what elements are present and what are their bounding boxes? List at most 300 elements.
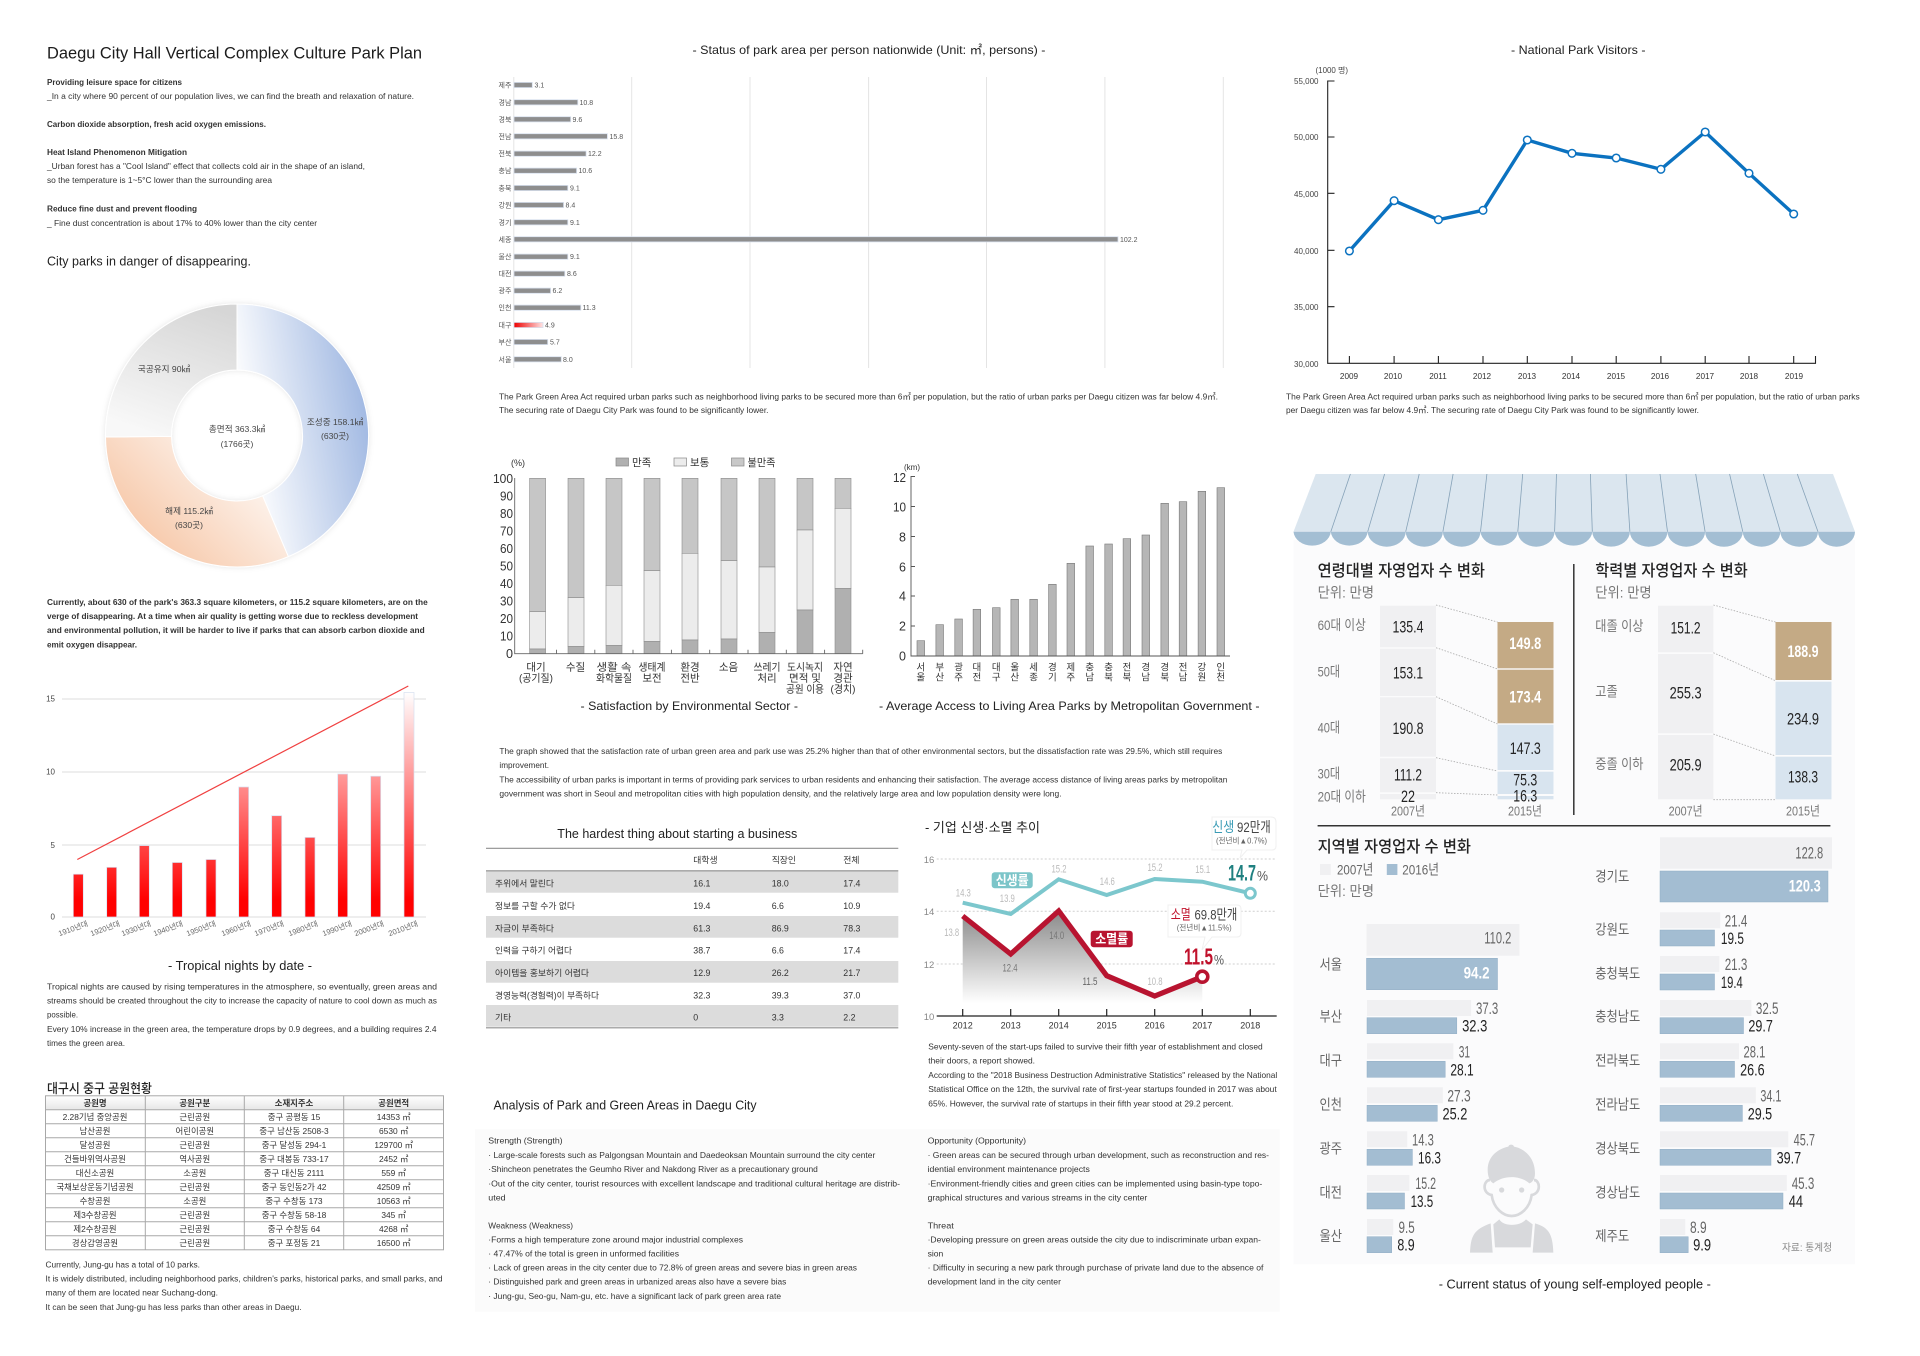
text block: disappearing parks xyxy=(47,597,428,650)
chart: self-employed by region: 강원도 xyxy=(1595,921,1629,937)
line chart: business creation and closure rates: 12.4 xyxy=(1002,962,1018,974)
bar chart: park area per person: 부산 xyxy=(499,338,512,346)
table: Jung-gu parks: 345 ㎡ xyxy=(381,1210,407,1220)
line chart: national park visitors: 2009 xyxy=(1340,372,1359,381)
title: Daegu City Hall Vertical Complex Culture Park Plan xyxy=(47,44,422,62)
bar chart: tropical nights: 10 xyxy=(46,768,56,776)
stacked bar chart: satisfaction by sector: 전반 xyxy=(680,672,700,684)
table: Jung-gu parks: 역사공원 xyxy=(179,1154,210,1164)
text: strength: ·Out of the city center, tourist resources with excellent landscape and traditional cultural heritage are distrib- xyxy=(488,1178,900,1188)
table: hardest thing about starting a business: 21.7 xyxy=(843,968,861,978)
chart: self-employed by age: 40대 xyxy=(1318,720,1340,736)
bar chart: access to living area parks: 강 xyxy=(1198,662,1207,674)
chart: self-employed by age: 20대 이하 xyxy=(1318,789,1366,805)
callout: closure count: 소멸 xyxy=(1171,906,1191,922)
legend: satisfaction xyxy=(616,457,776,469)
bar chart: park area per person: 8.6 xyxy=(567,271,577,278)
bar chart: park area per person: 3.1 xyxy=(534,82,544,90)
text block: start-up survival xyxy=(928,1041,1277,1108)
callout: creation count: (전년비▲0.7%) xyxy=(1216,836,1267,846)
table: Jung-gu parks: 근린공원 xyxy=(179,1182,210,1192)
bar chart: tropical nights xyxy=(46,686,426,938)
chart: self-employed by region: 8.9 xyxy=(1690,1218,1707,1237)
callout: closure count: 11.5 xyxy=(1184,944,1213,970)
chart: self-employed by age: 30대 xyxy=(1318,765,1340,781)
bar chart: park area per person: 8.0 xyxy=(563,357,573,364)
text block: satisfaction and accessibility: government was short in Seoul and metropolitan cities with high population density, and the relatively large area and low population density were long. xyxy=(499,788,1062,798)
chart: self-employed by age: 50대 xyxy=(1318,664,1340,680)
stacked bar chart: satisfaction by sector: 90 xyxy=(500,490,513,504)
text: weakness: · Lack of green areas in the city center due to 72.8% of green areas and severe bias in green areas xyxy=(488,1263,857,1273)
bar chart: access to living area parks xyxy=(893,463,1230,684)
bar chart: park area per person: 충북 xyxy=(499,184,512,192)
text: threat: development land in the city center xyxy=(928,1277,1061,1287)
text: weakness: · 47.47% of the total is green in unformed facilities xyxy=(488,1248,679,1258)
bar chart: access to living area parks: 북 xyxy=(1104,672,1113,684)
stacked bar chart: satisfaction by sector: 도시녹지 xyxy=(787,662,823,674)
chart: self-employed by age: 60대 이상 xyxy=(1318,617,1366,633)
bar chart: tropical nights: 1940년대 xyxy=(152,918,184,938)
bar chart: park area per person: 12.2 xyxy=(588,151,602,158)
chart: self-employed by age: 2007년 xyxy=(1391,804,1425,818)
text block: disappearing parks: verge of disappearing. At a time when air quality is getting worse due to reckless development xyxy=(47,611,418,621)
bar chart: tropical nights: 1920년대 xyxy=(89,918,121,938)
chart: self-employed by region: 충청북도 xyxy=(1595,965,1640,981)
bar chart: tropical nights: 1980년대 xyxy=(287,918,319,938)
text: opportunity: ·Environment-friendly cities and green cities can be implemented using basin-type topo- xyxy=(928,1178,1263,1188)
line chart: business creation and closure rates: 14 xyxy=(924,907,934,918)
callout: creation count: 92만개 xyxy=(1237,819,1271,835)
bar chart: tropical nights: 1950년대 xyxy=(185,918,217,938)
chart: self-employed by region: 9.9 xyxy=(1693,1236,1711,1255)
bar chart: tropical nights: 1990년대 xyxy=(321,918,353,938)
bar chart: tropical nights: 5 xyxy=(51,841,56,850)
line chart: national park visitors xyxy=(1294,65,1816,381)
text block: start-up survival: Statistical Office on the 12th, the survival rate of first-year startups founded in 2017 was about xyxy=(928,1084,1277,1094)
line chart: national park visitors: 50,000 xyxy=(1294,133,1319,142)
table: Jung-gu parks: 소공원 xyxy=(183,1168,206,1178)
donut chart: park area: 조성중 158.1㎢ xyxy=(307,417,364,427)
line chart: business creation and closure rates: 14.3 xyxy=(956,888,971,900)
text block: park benefits: Carbon dioxide absorption, fresh acid oxygen emissions. xyxy=(47,119,266,129)
text block: national park visitors: The Park Green Area Act required urban parks such as neighborhood living parks to be secured more than 6㎡ per population, but the ratio of urban parks xyxy=(1286,392,1860,402)
chart: self-employed by education: 대졸 이상 xyxy=(1595,618,1644,634)
bar chart: access to living area parks: 8 xyxy=(899,530,906,544)
table: Jung-gu parks: 국채보상운동기념공원 xyxy=(56,1182,134,1192)
callout: creation count: % xyxy=(1257,868,1268,884)
callout: creation count: 14.7 xyxy=(1228,860,1256,886)
text: strength: uted xyxy=(488,1192,506,1202)
callout: closure count: 69.8만개 xyxy=(1194,906,1237,922)
bar chart: park area per person: 경북 xyxy=(499,115,512,124)
line chart: national park visitors: (1000 명) xyxy=(1316,65,1348,75)
text block: park benefits: _Urban forest has a "Cool Island" effect that collects cold air in the shape of an island, xyxy=(46,161,365,171)
chart: self-employed by age: 135.4 xyxy=(1392,618,1424,637)
callout: closure count xyxy=(1168,905,1241,970)
chart: self-employed by region: 32.5 xyxy=(1756,999,1778,1018)
table: Jung-gu parks: 10563 ㎡ xyxy=(377,1196,411,1206)
line chart: national park visitors: 2016 xyxy=(1651,372,1670,381)
text block: Jung-gu parks: many of them are located near Suchang-dong. xyxy=(46,1288,218,1298)
stacked bar chart: satisfaction by sector: 20 xyxy=(500,612,513,626)
table: hardest thing about starting a business: 직장인 xyxy=(772,855,796,865)
table: Jung-gu parks: 제3수창공원 xyxy=(73,1210,117,1220)
text: threat: · Difficulty in securing a new park through purchase of private land due to the absence of xyxy=(928,1263,1264,1273)
table: Jung-gu parks: 중구 대신동 2111 xyxy=(264,1168,325,1178)
chart: self-employed by age: 22 xyxy=(1401,787,1415,806)
text: opportunity: idential environment maintenance projects xyxy=(928,1164,1090,1174)
table: Jung-gu parks: 중구 수창동 58-18 xyxy=(262,1210,327,1220)
text block: tropical nights: Tropical nights are caused by rising temperatures in the atmosphere, so eventually, green areas and xyxy=(47,982,437,992)
chart: self-employed by region: 경기도 xyxy=(1595,869,1629,885)
text block: satisfaction and accessibility: improvement. xyxy=(499,760,549,770)
line chart: business creation and closure rates: 2018 xyxy=(1240,1020,1260,1030)
text block: tropical nights: streams should be created throughout the city to increase the capacity of nature to cool down as much as xyxy=(47,996,437,1006)
chart title: national park visitors: - National Park Visitors - xyxy=(1511,43,1646,57)
table: hardest thing about starting a business: 경영능력(경험력)이 부족하다 xyxy=(495,989,599,1000)
chart title: park area per person: - Status of park area per person nationwide (Unit: ㎡, persons) - xyxy=(692,43,1046,57)
bar chart: park area per person: 9.1 xyxy=(570,186,580,192)
table: hardest thing about starting a business: 17.4 xyxy=(843,878,861,888)
table: Jung-gu parks: 근린공원 xyxy=(179,1112,210,1122)
bar chart: park area per person: 충남 xyxy=(499,166,512,175)
chart caption: access to living area parks: - Average Access to Living Area Parks by Metropolitan Government - xyxy=(879,699,1260,713)
stacked bar chart: satisfaction by sector: (공기질) xyxy=(519,672,553,684)
donut chart: park area: 총면적 363.3㎢ xyxy=(209,423,266,434)
stacked bar chart: satisfaction by sector: 60 xyxy=(500,542,513,556)
chart: self-employed by region xyxy=(1318,837,1832,1255)
text: strength: ·Shincheon penetrates the Geumho River and Nakdong River as a precautionary ground xyxy=(488,1164,818,1174)
bar chart: access to living area parks: 전 xyxy=(973,672,981,684)
chart: self-employed by education: 2015년 xyxy=(1786,804,1820,818)
chart: self-employed by region: 45.7 xyxy=(1794,1130,1815,1149)
chart title: business creation and closure: - 기업 신생·소멸 추이 xyxy=(925,820,1040,835)
table: hardest thing about starting a business: 39.3 xyxy=(772,990,789,1000)
chart: self-employed by education: 고졸 xyxy=(1595,684,1618,700)
bar chart: park area per person: 10.6 xyxy=(578,168,592,175)
table: hardest thing about starting a business: 아이템을 홍보하기 어렵다 xyxy=(495,967,589,978)
text: opportunity: graphical structures and various streams in the city center xyxy=(928,1192,1148,1202)
legend: satisfaction: 불만족 xyxy=(748,457,776,469)
table: Jung-gu parks: 달성공원 xyxy=(80,1140,110,1150)
table: Jung-gu parks: 대신소공원 xyxy=(76,1168,114,1178)
text block: Jung-gu parks xyxy=(46,1260,443,1312)
table: hardest thing about starting a business: 자금이 부족하다 xyxy=(495,924,554,934)
line chart: business creation and closure rates: 2013 xyxy=(1001,1020,1021,1030)
line chart: national park visitors: 40,000 xyxy=(1294,247,1319,256)
table: Jung-gu parks: 근린공원 xyxy=(179,1140,210,1150)
text block: park benefits: so the temperature is 1~5°C lower than the surrounding area xyxy=(47,175,272,185)
text block: park benefits: Heat Island Phenomenon Mitigation xyxy=(47,147,187,157)
table: Jung-gu parks: 중구 수창동 64 xyxy=(268,1224,321,1234)
text block: satisfaction and accessibility: The graph showed that the satisfaction rate of urban green area and park use was 25.2% higher than that of other environmental sectors, but the dissatisfaction rate was 29.5%, which still requires xyxy=(499,746,1222,756)
bar chart: access to living area parks: 남 xyxy=(1179,672,1188,684)
donut chart: park area: 국공유지 90㎢ xyxy=(138,364,190,374)
chart: self-employed by region: 15.2 xyxy=(1415,1174,1436,1193)
text: strength: Strength (Strength) xyxy=(488,1136,563,1146)
text block: park benefits: _In a city where 90 percent of our population lives, we can find the breath and relaxation of nature. xyxy=(46,91,414,101)
bar chart: access to living area parks: 울 xyxy=(1010,662,1019,674)
table: Jung-gu parks: 제2수창공원 xyxy=(73,1224,117,1234)
chart: self-employed by age: 111.2 xyxy=(1394,765,1422,784)
chart: self-employed by region: 제주도 xyxy=(1595,1228,1629,1244)
text block: national park visitors: per Daegu citizen was far below 4.9㎡. The securing rate of Daegu City Park was found to be significantly lower. xyxy=(1286,405,1699,415)
chart: self-employed by education: 151.2 xyxy=(1671,619,1701,638)
chart: self-employed by region: 45.3 xyxy=(1792,1174,1814,1193)
chart: self-employed by education: 255.3 xyxy=(1670,684,1702,703)
text: weakness xyxy=(488,1220,857,1301)
line chart: business creation and closure rates: 2014 xyxy=(1049,1020,1069,1030)
bar chart: park area per person: 경남 xyxy=(499,98,512,107)
bar chart: tropical nights: 0 xyxy=(51,912,56,922)
table: Jung-gu parks: 건들바위역사공원 xyxy=(64,1154,126,1164)
chart: self-employed by age: 연령대별 자영업자 수 변화 xyxy=(1318,562,1485,580)
table: hardest thing about starting a business: 6.6 xyxy=(772,901,784,911)
table: hardest thing about starting a business: 12.9 xyxy=(693,968,711,978)
stacked bar chart: satisfaction by sector: 소음 xyxy=(719,662,738,674)
line chart: national park visitors: 2018 xyxy=(1740,372,1759,381)
stacked bar chart: satisfaction by sector: 보전 xyxy=(642,672,662,684)
bar chart: park area per person: 전북 xyxy=(499,149,512,158)
bar chart: access to living area parks: 세 xyxy=(1029,662,1038,674)
donut chart: park area xyxy=(105,304,369,567)
table: hardest thing about starting a business xyxy=(486,848,898,1028)
bar chart: access to living area parks: 산 xyxy=(935,672,944,684)
text block: tropical nights xyxy=(47,982,437,1048)
table: hardest thing about starting a business: 18.0 xyxy=(772,878,789,888)
label: closure rate: 소멸률 xyxy=(1095,932,1128,946)
line chart: business creation and closure rates: 16 xyxy=(924,855,934,866)
icon: shop awning xyxy=(1294,474,1855,547)
chart: self-employed by age: 75.3 xyxy=(1513,770,1537,789)
legend: satisfaction: 보통 xyxy=(690,457,710,469)
bar chart: tropical nights: 2000년대 xyxy=(353,918,385,938)
line chart: business creation and closure rates: 15.2 xyxy=(1148,862,1162,874)
donut chart: park area: (1766곳) xyxy=(221,439,254,449)
chart: self-employed by age: 단위: 만명 xyxy=(1318,585,1374,601)
table: hardest thing about starting a business: 0 xyxy=(693,1013,698,1023)
label: creation rate: 신생률 xyxy=(996,873,1029,888)
chart: self-employed by education: 205.9 xyxy=(1670,755,1702,774)
table: hardest thing about starting a business: 6.6 xyxy=(772,946,784,956)
chart: self-employed by region: 대전 xyxy=(1320,1184,1342,1200)
chart: self-employed by age: 190.8 xyxy=(1392,719,1424,738)
text block: tropical nights: times the green area. xyxy=(47,1038,125,1048)
text block: start-up survival: According to the "2018 Business Destruction Administrative Statistics" released by the National xyxy=(928,1070,1277,1080)
legend: satisfaction: 만족 xyxy=(632,457,652,469)
table: Jung-gu parks xyxy=(46,1096,444,1250)
table: Jung-gu parks: 4268 ㎡ xyxy=(379,1224,409,1234)
bar chart: park area per person: 10.8 xyxy=(580,100,593,107)
line chart: business creation and closure rates: 2016 xyxy=(1145,1020,1165,1030)
bar chart: access to living area parks: 2 xyxy=(899,620,906,634)
chart: self-employed by region: 39.7 xyxy=(1777,1148,1801,1167)
text: strength: · Large-scale forests such as Palgongsan Mountain and Daedeoksan Mountain surround the city center xyxy=(488,1150,876,1160)
chart: self-employed by region: 26.6 xyxy=(1740,1060,1765,1079)
table: hardest thing about starting a business: 3.3 xyxy=(772,1013,784,1023)
text: weakness: · Distinguished park and green areas in urbanized areas also have a severe bias xyxy=(488,1277,786,1287)
stacked bar chart: satisfaction by sector: 처리 xyxy=(757,672,777,684)
bar chart: access to living area parks: 충 xyxy=(1085,662,1094,674)
chart: self-employed by region: 전라남도 xyxy=(1595,1096,1640,1112)
bar chart: park area per person: 인천 xyxy=(499,303,511,312)
table: hardest thing about starting a business: 19.4 xyxy=(693,901,711,911)
callout: creation count: 신생 xyxy=(1212,819,1234,835)
line chart: national park visitors: 35,000 xyxy=(1294,303,1319,312)
bar chart: access to living area parks: 원 xyxy=(1198,672,1206,684)
table: Jung-gu parks: 경상감영공원 xyxy=(72,1238,118,1248)
table: Jung-gu parks: 소재지주소 xyxy=(275,1098,314,1108)
table: Jung-gu parks: 남산공원 xyxy=(80,1126,110,1136)
text block: start-up survival: Seventy-seven of the start-ups failed to survive their fifth year of establishment and closed xyxy=(928,1041,1263,1051)
chart: self-employed by region: 44 xyxy=(1789,1192,1803,1211)
bar chart: access to living area parks: 대 xyxy=(992,662,1001,674)
bar chart: park area per person: 5.7 xyxy=(550,340,560,346)
table: Jung-gu parks: 2452 ㎡ xyxy=(379,1154,409,1164)
table title: hardest thing about starting a business: The hardest thing about starting a business xyxy=(557,827,797,841)
heading: analysis of park and green areas: Analysis of Park and Green Areas in Daegu City xyxy=(494,1098,757,1112)
line chart: national park visitors: 2014 xyxy=(1562,372,1581,381)
caption: young self-employed: - Current status of young self-employed people - xyxy=(1439,1278,1711,1292)
stacked bar chart: satisfaction by sector: 생태계 xyxy=(638,662,666,674)
text: weakness: ·Forms a high temperature zone around major industrial complexes xyxy=(488,1234,743,1244)
line chart: national park visitors: 45,000 xyxy=(1294,190,1319,199)
text block: park green area act: The securing rate of Daegu City Park was found to be significantly lower. xyxy=(499,405,768,415)
bar chart: park area per person: 9.1 xyxy=(570,220,580,227)
table: hardest thing about starting a business: 38.7 xyxy=(693,946,711,956)
text block: park benefits: Providing leisure space for citizens xyxy=(47,77,182,87)
chart: self-employed by age: 149.8 xyxy=(1509,634,1541,653)
table: Jung-gu parks: 2.28기념 중앙공원 xyxy=(63,1112,127,1122)
line chart: business creation and closure rates: 2015 xyxy=(1097,1020,1117,1030)
line chart: national park visitors: 2015 xyxy=(1607,372,1626,381)
text block: start-up survival: their doors, a report showed. xyxy=(928,1056,1035,1066)
bar chart: access to living area parks: 울 xyxy=(916,672,925,684)
table: hardest thing about starting a business: 전체 xyxy=(843,855,859,865)
text: opportunity: · Green areas can be secured through urban development, such as reconstruction and res- xyxy=(928,1150,1269,1160)
bar chart: access to living area parks: 4 xyxy=(899,590,906,604)
chart: self-employed by education: 단위: 만명 xyxy=(1595,585,1652,601)
table: Jung-gu parks: 근린공원 xyxy=(179,1238,210,1248)
table: hardest thing about starting a business: 대학생 xyxy=(693,855,718,865)
bar chart: access to living area parks: 전 xyxy=(1179,662,1187,674)
bar chart: access to living area parks: 북 xyxy=(1123,672,1132,684)
chart: self-employed by region: 대구 xyxy=(1320,1053,1342,1069)
bar chart: access to living area parks: 주 xyxy=(1066,672,1075,684)
bar chart: access to living area parks: 경 xyxy=(1141,662,1150,674)
table: hardest thing about starting a business: 16.1 xyxy=(693,878,711,888)
table: Jung-gu parks: 중구 포정동 21 xyxy=(268,1238,321,1248)
chart: self-employed by region: 94.2 xyxy=(1464,964,1490,983)
bar chart: park area per person: 세종 xyxy=(499,235,512,244)
text block: disappearing parks: Currently, about 630 of the park's 363.3 square kilometers, or 115.2 square kilometers, are on the xyxy=(47,597,428,607)
callout: closure count: (전년비▲11.5%) xyxy=(1177,922,1232,932)
chart: self-employed by age: 147.3 xyxy=(1510,739,1541,758)
text block: Jung-gu parks: It is widely distributed, including neighborhood parks, children's parks, historical parks, and small parks, and xyxy=(46,1274,443,1284)
bar chart: access to living area parks: 남 xyxy=(1141,672,1150,684)
heading: city parks in danger: City parks in danger of disappearing. xyxy=(47,254,251,268)
text block: start-up survival: 65%. However, the survival rate of startups in their fifth year stood at 29.2 percent. xyxy=(928,1098,1233,1108)
table: Jung-gu parks: 소공원 xyxy=(183,1196,206,1206)
table: Jung-gu parks: 16500 ㎡ xyxy=(377,1238,411,1248)
line chart: business creation and closure rates: 10.8 xyxy=(1148,976,1162,988)
chart: self-employed by region: 122.8 xyxy=(1795,843,1823,862)
table: Jung-gu parks: 14353 ㎡ xyxy=(377,1112,411,1122)
chart: self-employed by age: 2015년 xyxy=(1508,804,1542,818)
bar chart: park area per person: 4.9 xyxy=(545,322,555,330)
donut chart: park area: 해제 115.2㎢ xyxy=(165,506,213,516)
line chart: business creation and closure rates: 15.2 xyxy=(1052,864,1066,876)
chart: self-employed by region: 37.3 xyxy=(1476,999,1498,1018)
stacked bar chart: satisfaction by sector: 100 xyxy=(493,472,513,486)
bar chart: tropical nights: 1970년대 xyxy=(253,918,285,938)
table: Jung-gu parks: 559 ㎡ xyxy=(381,1168,407,1178)
chart: self-employed by region: 29.7 xyxy=(1748,1017,1773,1036)
table: Jung-gu parks: 중구 남산동 2508-3 xyxy=(259,1126,329,1136)
chart: self-employed by education: 234.9 xyxy=(1787,709,1819,728)
line chart: national park visitors: 30,000 xyxy=(1294,360,1319,369)
stacked bar chart: satisfaction by sector: 30 xyxy=(500,594,513,608)
bar chart: access to living area parks: 서 xyxy=(916,662,925,674)
text block: park benefits: Reduce fine dust and prevent flooding xyxy=(47,204,197,214)
text block: satisfaction and accessibility xyxy=(499,746,1228,798)
stacked bar chart: satisfaction by sector: 자연 xyxy=(833,662,853,674)
text: opportunity: Opportunity (Opportunity) xyxy=(928,1136,1026,1146)
text: weakness: · Jung-gu, Seo-gu, Nam-gu, etc. have a significant lack of park green area rate xyxy=(488,1291,781,1301)
table: hardest thing about starting a business: 37.0 xyxy=(843,990,861,1000)
chart: self-employed by region: 광주 xyxy=(1320,1140,1342,1156)
line chart: business creation and closure rates: 14.0 xyxy=(1049,930,1064,942)
chart: self-employed by education: 2007년 xyxy=(1669,804,1703,818)
chart: self-employed by region: 29.5 xyxy=(1748,1104,1772,1123)
table: Jung-gu parks: 중구 수창동 173 xyxy=(265,1196,323,1206)
bar chart: park area per person: 전남 xyxy=(499,132,512,141)
donut chart: park area: (630곳) xyxy=(175,520,203,530)
bar chart: access to living area parks: 종 xyxy=(1029,672,1038,684)
chart: self-employed by region: 경상북도 xyxy=(1595,1140,1640,1156)
bar chart: access to living area parks: 구 xyxy=(992,672,1001,684)
text: weakness: Weakness (Weakness) xyxy=(488,1220,573,1230)
text block: national park visitors xyxy=(1286,392,1860,415)
line chart: business creation and closure rates: 2017 xyxy=(1192,1020,1212,1030)
chart: self-employed by age: 153.1 xyxy=(1393,663,1423,682)
chart: self-employed by region: 충청남도 xyxy=(1595,1009,1640,1025)
table: hardest thing about starting a business: 기타 xyxy=(495,1013,511,1023)
chart: self-employed by region: 21.3 xyxy=(1725,955,1747,974)
table: Jung-gu parks: 공원명 xyxy=(83,1098,107,1108)
chart: self-employed by age xyxy=(1318,562,1554,818)
bar chart: park area per person xyxy=(499,77,1223,368)
donut chart: park area: (630곳) xyxy=(321,431,349,441)
table: Jung-gu parks: 근린공원 xyxy=(179,1224,210,1234)
text block: tropical nights: possible. xyxy=(47,1010,78,1020)
chart: self-employed by education xyxy=(1595,562,1832,818)
line chart: national park visitors: 2017 xyxy=(1696,372,1715,381)
table: hardest thing about starting a business: 10.9 xyxy=(843,901,861,911)
table: hardest thing about starting a business: 인력을 구하기 어렵다 xyxy=(495,945,572,956)
chart: self-employed by education: 중졸 이하 xyxy=(1595,756,1644,772)
text: threat: Threat xyxy=(928,1220,955,1230)
line chart: national park visitors: 2019 xyxy=(1785,372,1804,381)
text: opportunity xyxy=(928,1136,1269,1202)
stacked bar chart: satisfaction by sector: 수질 xyxy=(566,662,585,674)
stacked bar chart: satisfaction by sector: 환경 xyxy=(680,660,700,674)
bar chart: access to living area parks: 천 xyxy=(1216,672,1225,684)
text block: satisfaction and accessibility: The accessibility of urban parks is important in terms of providing park services to urban residents and enhancing their satisfaction. The average access distance of living areas parks by metropolitan xyxy=(499,774,1228,784)
chart: self-employed by region: 27.3 xyxy=(1447,1086,1471,1105)
text block: park benefits xyxy=(46,77,414,228)
bar chart: park area per person: 6.2 xyxy=(552,288,562,295)
